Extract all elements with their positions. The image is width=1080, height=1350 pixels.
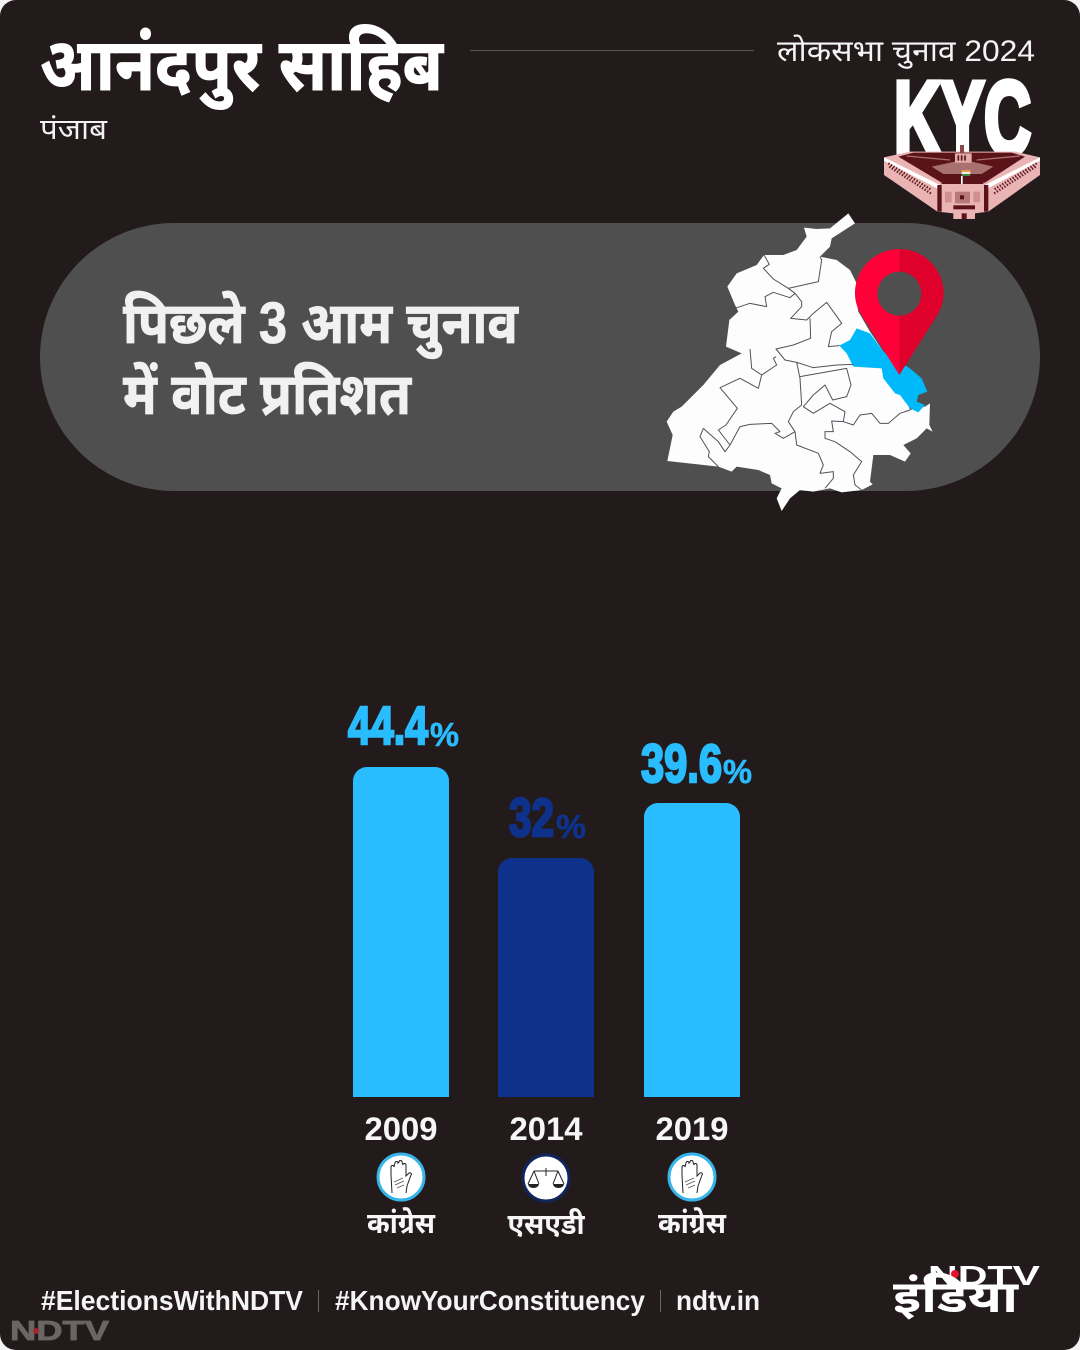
watermark: NDTV: NDTV [10,1315,109,1346]
map: district borders [700,255,910,490]
panel heading text: में वोट प्रतिशत [123,362,412,427]
KYC logo with parliament [884,61,1040,219]
logo: NDTV India [893,1260,1040,1322]
bar: 2019: % [723,753,752,790]
bar: 2009: % [430,716,459,753]
label: SAD 2014: एसएडी [508,1208,585,1241]
icon: SAD scales 2014 [523,1155,569,1201]
bar: 2009 [348,696,459,1147]
panel heading text [123,291,519,427]
footer hashtags [41,1285,760,1316]
series label: लोकसभा चुनाव 2024 [777,34,1035,69]
footer hashtags: #KnowYourConstituency [335,1285,645,1316]
logo: NDTV India: NDTV [928,1260,1040,1291]
icon: congress hand 2009 [378,1154,424,1200]
bar: 2014: 32 [509,788,554,848]
bar: 2009: 44.4 [348,696,428,756]
map: Punjab districts with location pin [667,213,944,511]
map: state outline [667,213,933,511]
bar chart: vote share [348,696,752,1147]
subtitle: state: पंजाब [40,114,107,146]
footer hashtags: ndtv.in [676,1285,760,1316]
footer hashtags: #ElectionsWithNDTV [41,1285,303,1316]
icon: congress hand 2019 [669,1154,715,1200]
bar: 2014: 2014 [510,1111,583,1147]
panel heading text: पिछले 3 आम चुनाव [123,291,519,359]
bar: 2009: 2009 [364,1111,438,1147]
bar: 2019: 2019 [656,1111,728,1147]
icon: location pin [855,249,944,375]
panel: heading pill [40,223,1040,491]
title: आनंदपुर साहिब [40,24,445,110]
logo: NDTV India: इंडिया [893,1272,1019,1322]
bar: 2019 [641,734,752,1147]
map: highlighted constituency [839,328,927,412]
bar: 2019: 39.6 [641,734,722,794]
label: congress 2009: कांग्रेस [367,1206,436,1240]
label: congress 2019: कांग्रेस [658,1206,727,1240]
bar: 2014: % [556,808,586,845]
bar: 2014 [498,788,594,1147]
